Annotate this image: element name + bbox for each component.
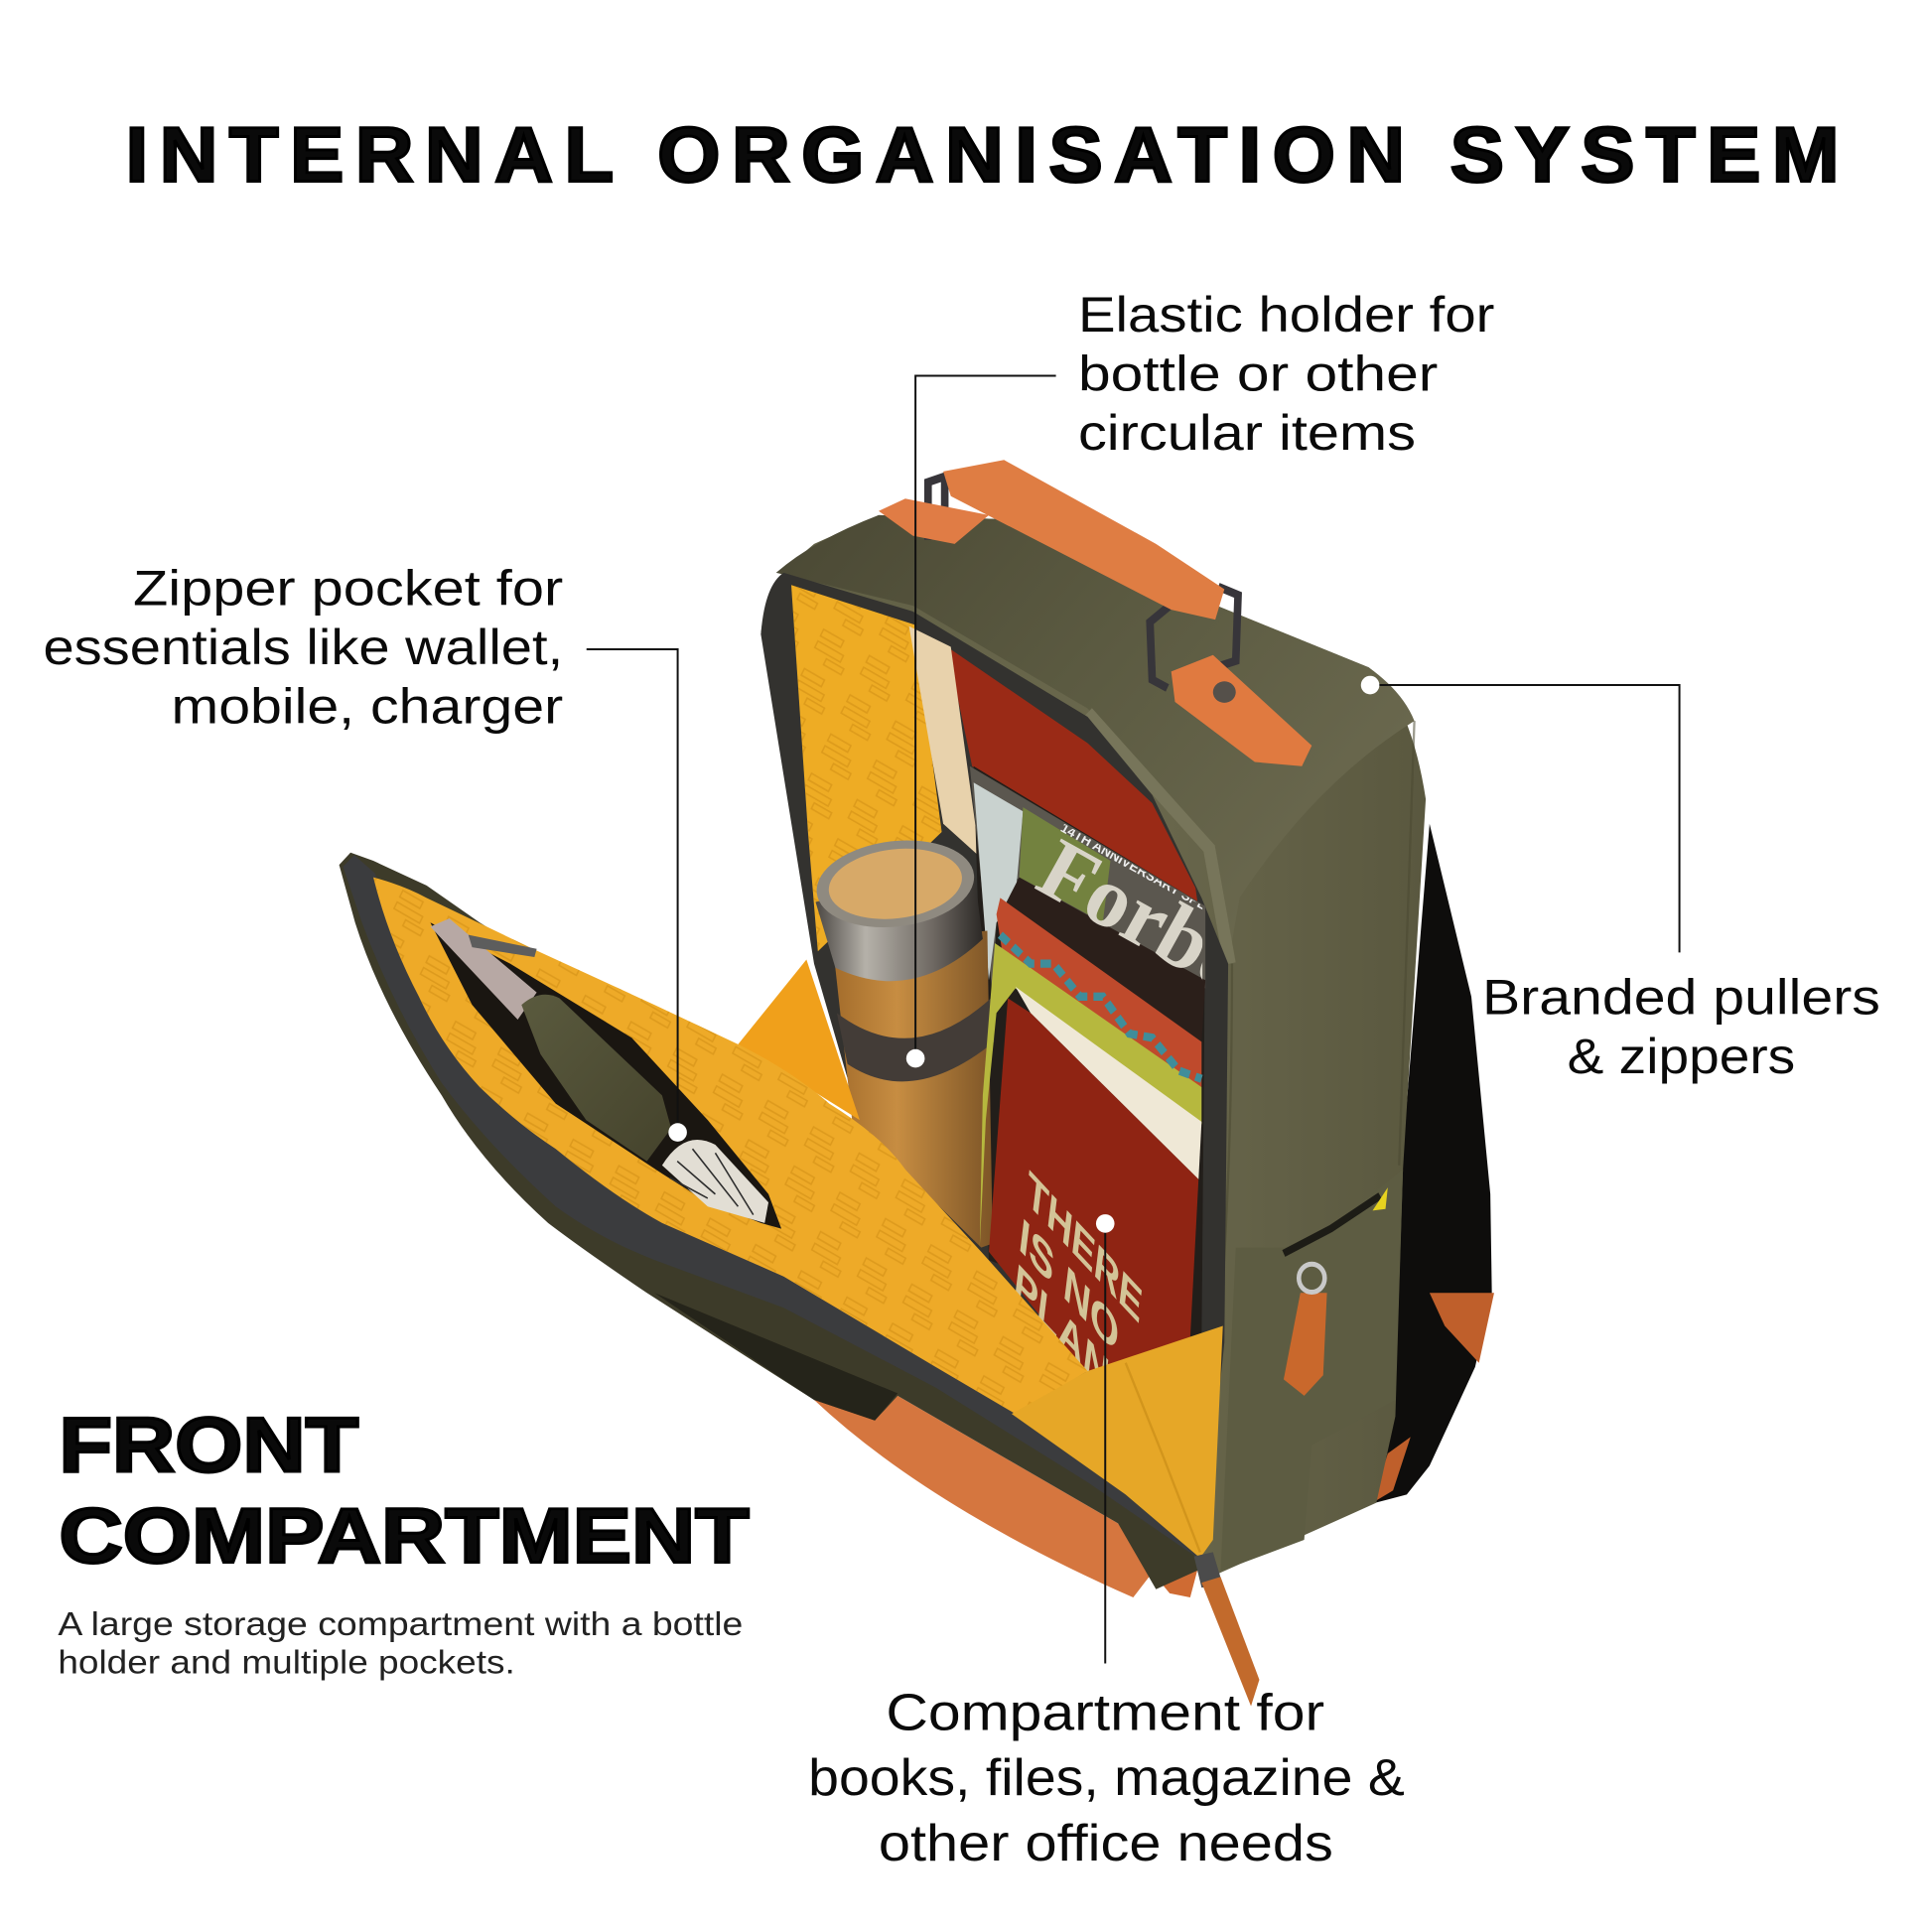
- olive umbrella: [521, 995, 671, 1162]
- bottom right yellow gusset: [1012, 1325, 1223, 1558]
- blue zigzag: [1000, 935, 1201, 1079]
- main opening rim: [760, 573, 1228, 1565]
- label: Compartment for: [886, 1684, 1324, 1741]
- label: books, files, magazine &: [808, 1749, 1405, 1807]
- book title: [1012, 1159, 1145, 1405]
- leader line: [1370, 685, 1680, 952]
- description text: A large storage compartment with a bottle: [58, 1606, 743, 1643]
- label: Elastic holder for: [1078, 287, 1494, 343]
- flap strap: [654, 1293, 897, 1421]
- label: [43, 560, 563, 735]
- flap yellow lining: [373, 878, 1087, 1414]
- side pocket: [1220, 1170, 1403, 1571]
- handle rings: [928, 477, 1238, 688]
- handle strip: [943, 460, 1224, 620]
- strap orange tabs: [1373, 1293, 1494, 1503]
- wood board: [909, 626, 980, 857]
- left orange tab: [879, 498, 989, 544]
- book title: THERE: [1024, 1159, 1145, 1334]
- back yellow gusset: [738, 960, 860, 1120]
- callout: compartment: [808, 1214, 1405, 1872]
- label: [808, 1684, 1405, 1872]
- flap pattern: [373, 878, 1087, 1414]
- red book: [989, 998, 1198, 1375]
- label: Zipper pocket for: [133, 560, 563, 616]
- yellow lining: [791, 585, 942, 951]
- magazine text: [1035, 824, 1203, 981]
- metal clip: [430, 918, 537, 1020]
- dot: [1361, 676, 1379, 694]
- dot: [1096, 1214, 1115, 1233]
- flap grey rim: [343, 855, 1200, 1558]
- side panel seams: [1218, 721, 1415, 1342]
- label: other office needs: [879, 1815, 1333, 1872]
- magazine text: 14TH ANNIVERSARY SPEC: [1058, 820, 1218, 918]
- elastic band: [837, 997, 994, 1081]
- orange bottom piece: [1156, 1569, 1197, 1597]
- bag body: [760, 515, 1426, 1575]
- zipper head and tail: [1194, 1552, 1259, 1706]
- label: Branded pullers: [1482, 969, 1880, 1025]
- book title: PLAN: [1012, 1251, 1112, 1405]
- yellow zip tip: [1373, 1187, 1388, 1210]
- red organiser: [997, 897, 1201, 1087]
- orange base: [814, 1396, 1153, 1597]
- zip pull: [469, 935, 537, 957]
- dot: [906, 1049, 924, 1067]
- callout: elastic holder: [906, 287, 1494, 1067]
- bottle: [813, 832, 994, 1248]
- leader line: [915, 376, 1056, 1057]
- bag top panel: [776, 515, 1415, 964]
- label: mobile, charger: [172, 679, 563, 735]
- front flap and base: [340, 460, 1311, 1706]
- description text: [58, 1606, 743, 1681]
- patterned strip: [980, 943, 1201, 1248]
- leader line: [1104, 1223, 1106, 1663]
- lining pattern: [791, 585, 942, 951]
- right orange tab: [1172, 655, 1311, 766]
- label: circular items: [1078, 405, 1416, 461]
- description text: holder and multiple pockets.: [58, 1644, 515, 1681]
- inner pocket: [430, 918, 781, 1229]
- label: [1482, 969, 1880, 1084]
- label: essentials like wallet,: [43, 620, 563, 675]
- flap outer shell: [340, 853, 1201, 1589]
- patterned pouch: [662, 1140, 768, 1223]
- dot: [668, 1123, 687, 1142]
- heading: front compartment: COMPARTMENT: [60, 1492, 750, 1580]
- heading: front compartment: [60, 1401, 750, 1580]
- side pocket zip: [1284, 1195, 1380, 1253]
- rivet: [1213, 681, 1236, 703]
- gusset fold: [1126, 1363, 1200, 1552]
- title: INTERNAL ORGANISATION SYSTEM: [126, 110, 1851, 198]
- top handle: [879, 460, 1311, 766]
- book title: IS NO: [1017, 1206, 1122, 1364]
- label: & zippers: [1568, 1029, 1795, 1084]
- backpack illustration: [760, 515, 1494, 1575]
- back strap: [1369, 824, 1492, 1504]
- callout: branded pullers: [1361, 676, 1880, 1084]
- zip band on seam: [1087, 713, 1230, 964]
- red back panel: [947, 646, 1201, 931]
- orange pocket puller: [1284, 1293, 1327, 1396]
- heading: front compartment: FRONT: [60, 1401, 358, 1488]
- magazine text: Forbes: [1024, 820, 1292, 1027]
- leader line: [587, 649, 678, 1131]
- magazine: [970, 766, 1205, 997]
- metal puller clip: [1299, 1264, 1324, 1292]
- interior shadow: [974, 766, 1205, 1342]
- label: [1078, 287, 1494, 461]
- label: bottle or other: [1078, 345, 1438, 401]
- white book pages: [1016, 987, 1201, 1179]
- black file pocket: [1000, 878, 1205, 1041]
- callout: zipper pocket: [43, 560, 687, 1142]
